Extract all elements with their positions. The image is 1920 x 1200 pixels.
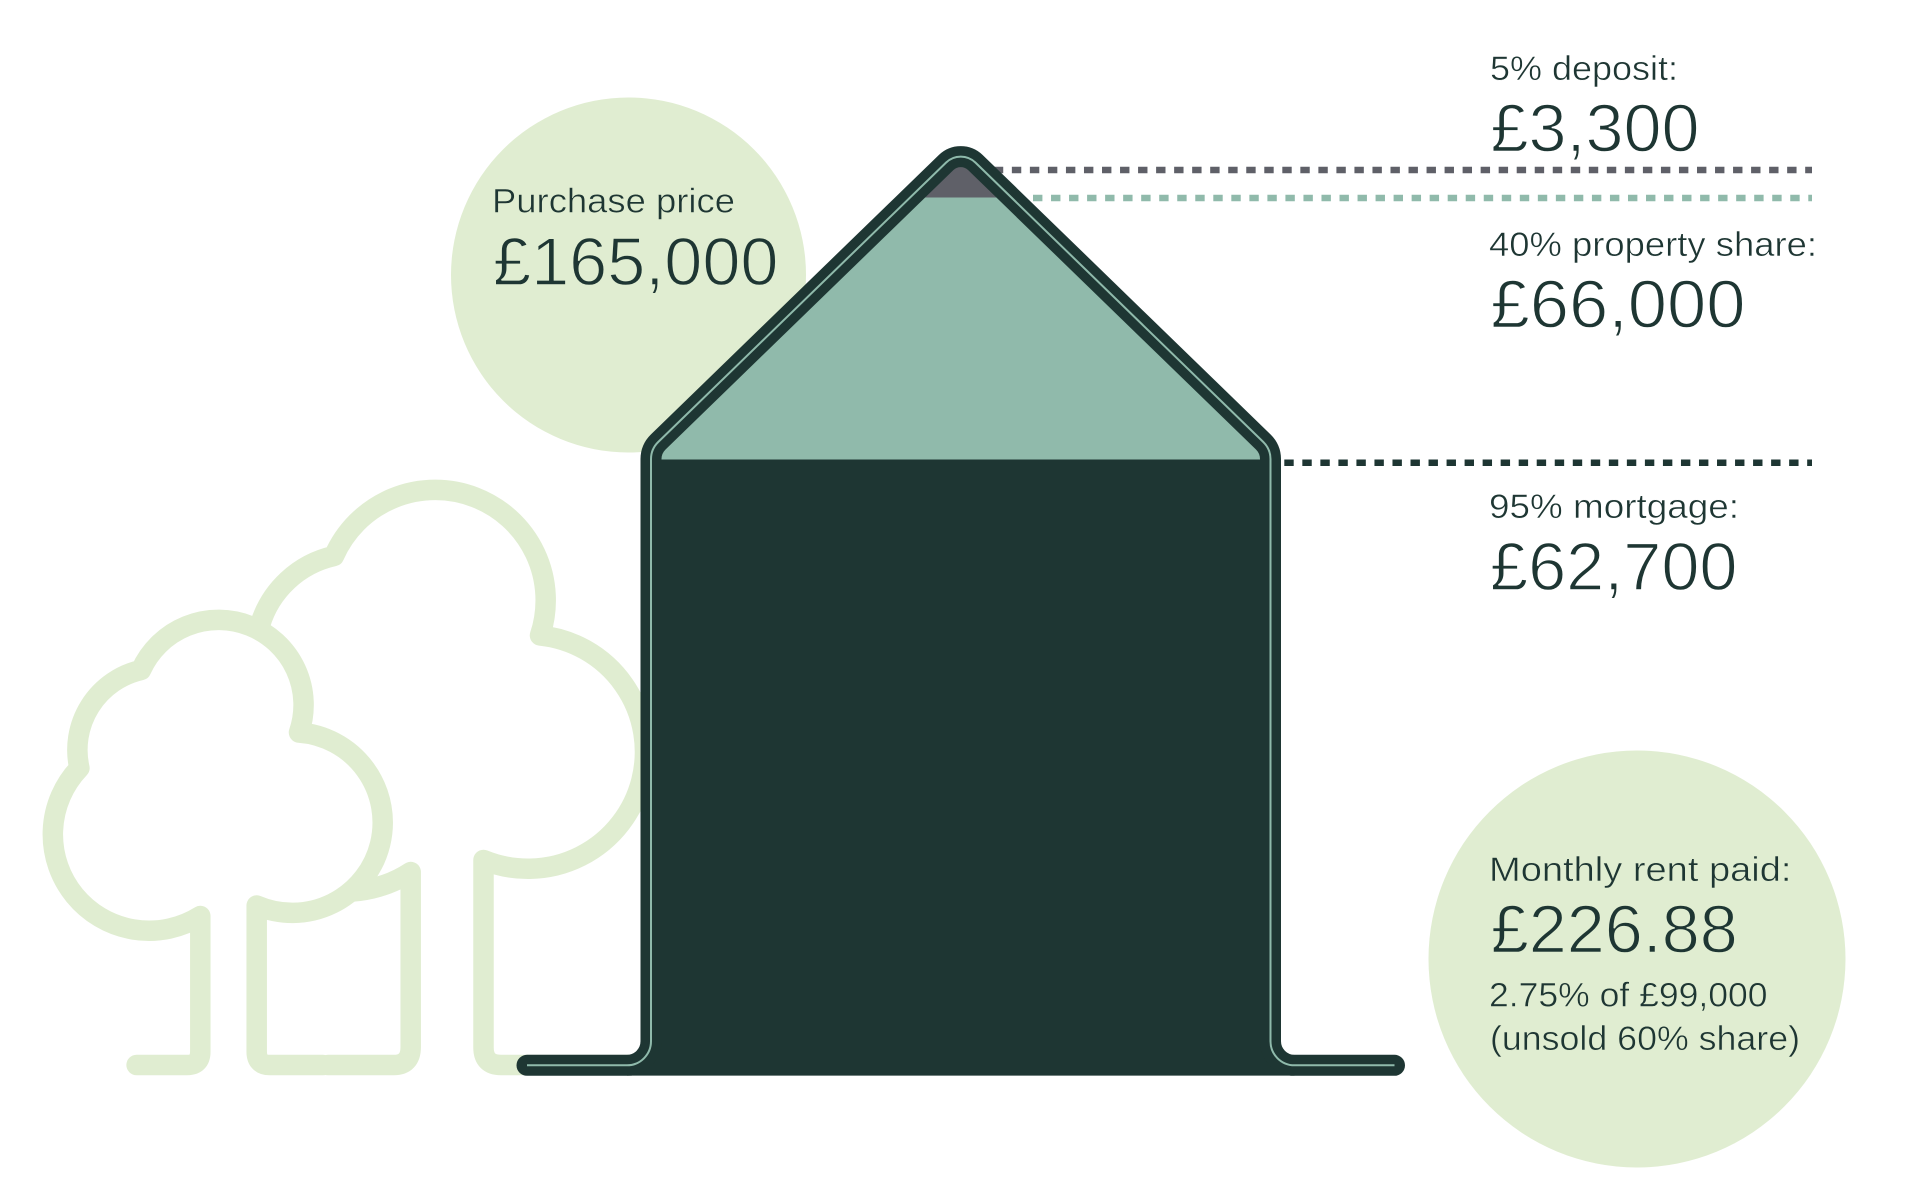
icon: small tree outline (53, 620, 383, 1065)
dotted line: property share level (1033, 195, 1812, 201)
house outline (527, 157, 1394, 1065)
icon: large tree outline (260, 490, 645, 1065)
text: property share: 40% property share: (1489, 226, 1817, 264)
text: monthly rent (1489, 851, 1800, 1058)
house fill: mortgage section (627, 460, 1294, 1076)
text: mortgage: 95% mortgage: (1489, 488, 1739, 526)
house (527, 140, 1394, 1076)
text: monthly rent: £226.88 (1491, 891, 1738, 967)
text: purchase price: £165,000 (493, 224, 778, 300)
house fill: deposit section (925, 167, 996, 198)
icon: middle trunk (328, 872, 411, 1065)
house inner highlight line (527, 157, 1394, 1065)
text: monthly rent: 2.75% of £99,000 (1489, 977, 1768, 1015)
text: deposit: 5% deposit: (1490, 50, 1678, 88)
text: mortgage: £62,700 (1490, 529, 1738, 605)
text: monthly rent: (unsold 60% share) (1490, 1020, 1800, 1058)
text: purchase price (492, 183, 778, 300)
icon: trees (53, 490, 645, 1065)
text: mortgage (1489, 488, 1739, 605)
text: monthly rent: Monthly rent paid: (1489, 851, 1792, 889)
text: deposit (1490, 50, 1700, 167)
panel: monthly rent circle (1428, 750, 1846, 1168)
dotted line: deposit level (976, 167, 1812, 173)
panel: purchase price circle (451, 98, 806, 452)
text: property share (1489, 226, 1817, 343)
text: purchase price: Purchase price (492, 183, 735, 221)
dotted line: mortgage level (1284, 459, 1812, 466)
text: deposit: £3,300 (1490, 91, 1700, 167)
house fill: property share section (640, 198, 1280, 460)
text: property share: £66,000 (1490, 267, 1746, 343)
